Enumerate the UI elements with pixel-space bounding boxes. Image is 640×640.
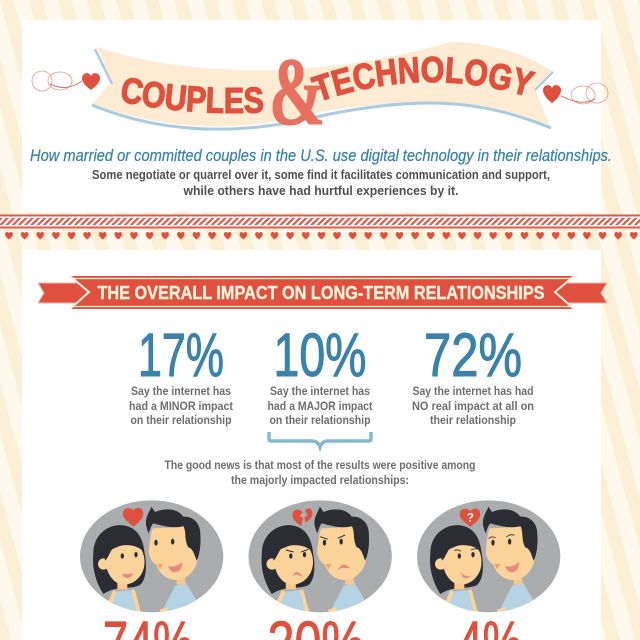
panel: title (22, 20, 601, 212)
icon: question heart (460, 509, 480, 527)
stat: 72%: Say the internet has had (412, 386, 534, 398)
good news text: the majorly impacted relationships: (231, 475, 409, 487)
intro text: Some negotiate or quarrel over it, some find it facilitates communication and support, (92, 168, 550, 182)
stat: 17%: 17% (138, 321, 224, 389)
stat: 10%: on their relationship (270, 415, 370, 427)
title word: technology: TECHNOLOGY (310, 56, 536, 100)
stat: 10% (268, 321, 373, 427)
stat: 72%: NO real impact at all on (412, 401, 534, 413)
stat: 72% (412, 321, 534, 427)
stat: 17% (129, 321, 233, 427)
icon: question heart: ? (467, 511, 474, 525)
icon: heart (123, 508, 143, 527)
title word: couples: COUPLES (122, 78, 264, 114)
ampersand: & (269, 38, 325, 145)
icon: broken heart (292, 508, 312, 526)
heading text: THE OVERALL IMPACT ON LONG-TERM RELATIONSHIPS (98, 283, 544, 303)
intro text (92, 168, 550, 198)
stat: 72%: their relationship (430, 415, 516, 427)
stat: 72%: 72% (424, 321, 522, 389)
stat: 17%: on their relationship (130, 415, 232, 427)
good news text: The good news is that most of the results were positive among (164, 460, 476, 472)
illustration: happy couple (80, 500, 223, 613)
illustration: unsure couple (417, 500, 560, 613)
good news text (164, 460, 476, 487)
stat: 17%: had a MINOR impact (129, 401, 233, 413)
intro text: while others have had hurtful experiences by it. (183, 184, 458, 198)
illustration: unhappy couple (248, 500, 392, 613)
panel: impact (22, 250, 601, 640)
bracket (269, 432, 371, 447)
icon: left heart flourish (32, 71, 100, 91)
section heading ribbon (38, 276, 607, 309)
icon: right heart flourish (543, 83, 608, 104)
stat: 10%: had a MAJOR impact (268, 401, 373, 413)
divider ribbon (0, 214, 640, 242)
title banner (92, 38, 554, 145)
stat: 10%: Say the internet has (270, 386, 370, 398)
stat: 10%: 10% (274, 321, 366, 389)
stat: 17%: Say the internet has (131, 386, 231, 398)
